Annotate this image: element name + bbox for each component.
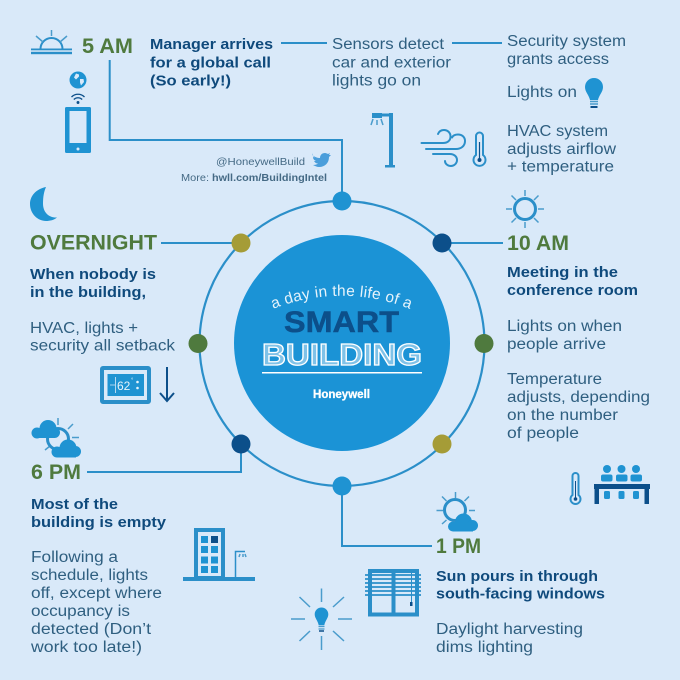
text: sun pours: south-facing windows bbox=[436, 586, 605, 602]
icon: sunrise bbox=[31, 30, 72, 54]
text: manager arrives: for a global call bbox=[150, 54, 271, 72]
center title badge: a day in the life of a bbox=[272, 284, 411, 309]
text: manager arrives bbox=[150, 36, 273, 90]
text: following a schedule: Following a bbox=[31, 549, 118, 566]
text: manager arrives: (So early!) bbox=[150, 72, 231, 90]
social handle: @HoneywellBuild bbox=[216, 156, 305, 168]
center title badge: Honeywell bbox=[313, 389, 370, 401]
heading: 1 PM: 1 PM bbox=[436, 535, 481, 558]
icon: conference table bbox=[594, 465, 650, 504]
text: when nobody bbox=[30, 266, 156, 301]
text: most of the building: building is empty bbox=[31, 514, 167, 531]
text: daylight harvesting: Daylight harvesting bbox=[436, 621, 583, 638]
text: security: Security system bbox=[507, 33, 626, 50]
text: hvac system: HVAC system bbox=[507, 123, 608, 140]
center title badge bbox=[234, 235, 450, 451]
heading: 6 PM: 6 PM bbox=[31, 461, 81, 484]
text: hvac setback: HVAC, lights + bbox=[30, 320, 138, 337]
text: temperature adjusts: adjusts, depending bbox=[507, 389, 650, 406]
timeline ring bbox=[87, 43, 503, 546]
text: sun pours: Sun pours in through bbox=[436, 568, 598, 585]
social handle: hwll.com/BuildingIntel bbox=[212, 172, 327, 184]
text: hvac system: adjusts airflow bbox=[507, 141, 617, 158]
icon: thermometer bbox=[474, 132, 486, 166]
text: following a schedule: schedule, lights bbox=[31, 567, 148, 584]
text: sun pours bbox=[436, 568, 605, 602]
icon: light bulb bbox=[585, 78, 603, 107]
text: meeting: Meeting in the bbox=[507, 264, 618, 281]
icon: down arrow bbox=[160, 367, 174, 401]
text: daylight harvesting bbox=[436, 621, 583, 656]
text: following a schedule: occupancy is bbox=[31, 603, 130, 620]
icon: smartphone bbox=[65, 107, 91, 153]
text: sensors: Sensors detect bbox=[332, 36, 445, 53]
text: sensors: lights go on bbox=[332, 72, 421, 90]
text: following a schedule: work too late!) bbox=[30, 639, 142, 656]
text: hvac system: + temperature bbox=[507, 158, 614, 176]
icon: glowing bulb bbox=[291, 588, 352, 650]
center title badge: SMART bbox=[284, 306, 399, 339]
icon: thermostat bbox=[102, 368, 149, 402]
icon: thermometer small bbox=[570, 473, 580, 504]
text: temperature adjusts: Temperature bbox=[507, 371, 602, 388]
icon: sun behind clouds bbox=[32, 418, 81, 458]
text: sensors bbox=[332, 36, 451, 90]
social handle: More: bbox=[181, 172, 209, 184]
icon: sun bbox=[506, 190, 544, 228]
text: hvac system bbox=[507, 123, 617, 176]
text: security: grants access bbox=[507, 51, 609, 68]
text: hvac setback: security all setback bbox=[30, 338, 175, 354]
text: meeting: conference room bbox=[507, 282, 638, 299]
center title badge: BUILDING bbox=[262, 337, 422, 372]
text: lights on when: people arrive bbox=[507, 336, 606, 353]
text: sensors: car and exterior bbox=[332, 54, 451, 72]
icon: moon bbox=[30, 187, 57, 221]
text: manager arrives: Manager arrives bbox=[150, 36, 273, 53]
text: following a schedule: detected (Don’t bbox=[31, 621, 152, 638]
text: temperature adjusts: on the number bbox=[507, 407, 618, 424]
text: when nobody: in the building, bbox=[30, 284, 146, 301]
social handle bbox=[181, 156, 327, 184]
text: meeting bbox=[507, 264, 638, 299]
heading: overnight: OVERNIGHT bbox=[30, 232, 157, 254]
icon: wifi bbox=[72, 94, 84, 103]
icon: sun and cloud bbox=[436, 492, 478, 532]
icon: window blinds bbox=[365, 571, 421, 615]
text: when nobody: When nobody is bbox=[30, 266, 156, 283]
text: most of the building bbox=[31, 496, 167, 531]
text: following a schedule bbox=[30, 549, 162, 656]
heading: 5 AM: 5 AM bbox=[82, 35, 133, 58]
text: following a schedule: off, except where bbox=[31, 585, 162, 602]
icon: globe bbox=[70, 72, 86, 88]
icon: office building bbox=[183, 530, 255, 581]
icon: thermostat: 62 bbox=[117, 379, 131, 393]
text: hvac setback bbox=[30, 320, 175, 354]
text: most of the building: Most of the bbox=[31, 496, 118, 513]
heading: 10 AM: 10 AM bbox=[507, 232, 569, 255]
icon: wind bbox=[422, 130, 465, 166]
text: security bbox=[507, 33, 626, 68]
text: daylight harvesting: dims lighting bbox=[436, 639, 533, 656]
text: lights on when: Lights on when bbox=[507, 318, 622, 335]
icon: street lamp bbox=[371, 113, 395, 168]
text: temperature adjusts: of people bbox=[507, 425, 579, 442]
icon: twitter bird bbox=[312, 152, 331, 167]
text: temperature adjusts bbox=[507, 371, 650, 442]
text: lights on when bbox=[507, 318, 622, 353]
text: lights on: Lights on bbox=[507, 84, 577, 101]
icon: thermostat: ° bbox=[131, 378, 134, 384]
